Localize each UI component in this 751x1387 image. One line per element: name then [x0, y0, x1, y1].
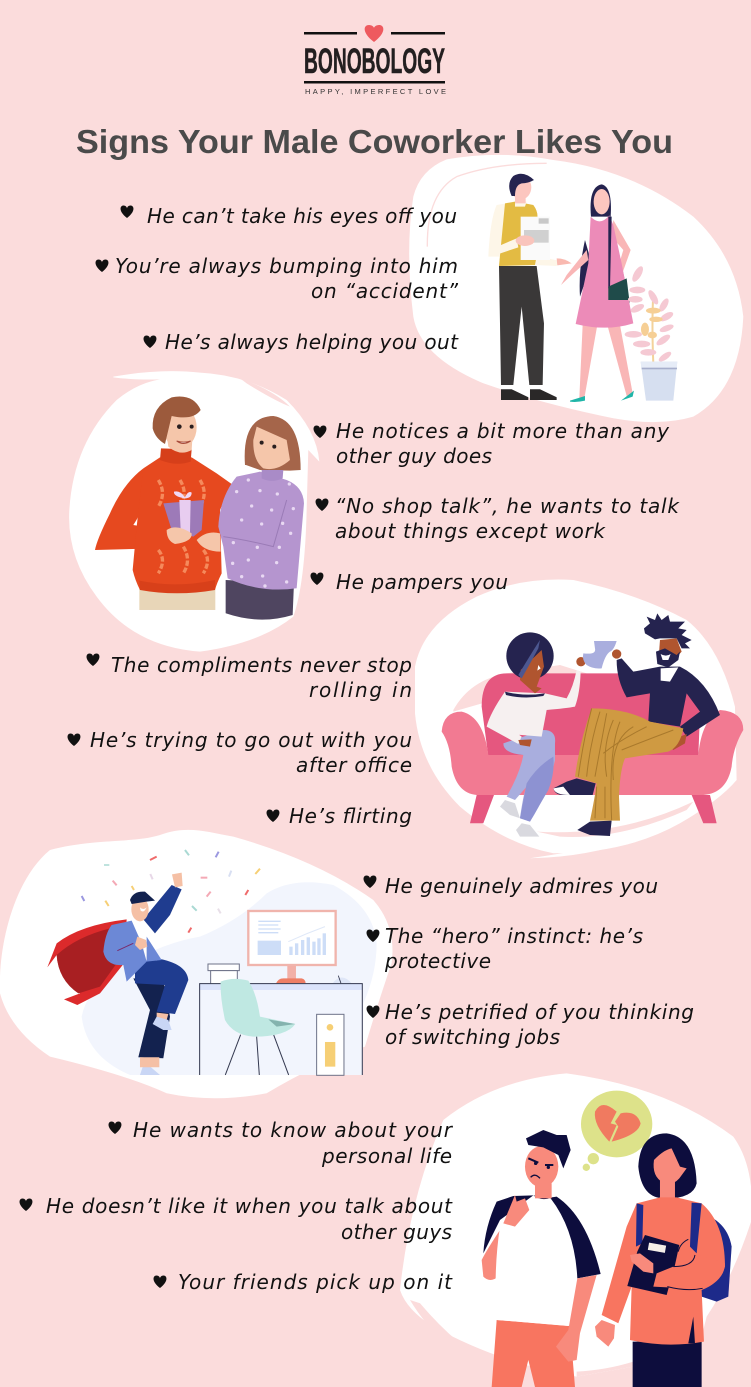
confetti	[82, 850, 260, 933]
woman	[561, 184, 634, 402]
woman in purple sweater	[218, 416, 304, 620]
text block: group five: personal life	[321, 1144, 452, 1168]
man	[488, 174, 572, 400]
logo tagline: HAPPY, IMPERFECT LOVE	[305, 87, 446, 96]
text block: group two: “No shop talk”, he wants to talk	[335, 494, 680, 518]
text block: group one	[96, 204, 459, 354]
text block: group three: The compliments never stop	[111, 653, 412, 677]
desk, monitor and computer	[199, 911, 363, 1075]
title: Signs Your Male Coworker Likes You	[76, 123, 673, 160]
woman with cup	[487, 632, 586, 837]
text block: group four: The “hero” instinct: he’s	[385, 924, 643, 948]
thought bubble with broken heart	[581, 1091, 652, 1171]
illustration: couple on a sofa	[415, 580, 743, 858]
text block: group five: Your friends pick up on it	[178, 1270, 453, 1294]
text block: group two	[311, 419, 680, 594]
white blob	[69, 371, 319, 652]
gift box	[163, 491, 221, 552]
text block: group three	[68, 653, 412, 828]
text block: group two: other guy does	[336, 444, 492, 468]
text block: group three: after office	[296, 753, 412, 777]
chair	[221, 979, 295, 1075]
illustration: colleagues handing over document	[409, 155, 743, 422]
text block: group three: rolling in	[309, 678, 412, 702]
sofa	[442, 673, 743, 823]
logo	[304, 25, 446, 96]
icon: logo heart	[365, 25, 383, 42]
text block: group five: He wants to know about your	[133, 1118, 454, 1142]
man with beard	[553, 613, 720, 836]
text block: group two: He pampers you	[336, 570, 508, 594]
illustration: superhero office worker	[0, 830, 393, 1098]
text block: group three: He’s trying to go out with you	[90, 728, 412, 752]
text block: group four: protective	[384, 949, 491, 973]
text block: group two: about things except work	[335, 519, 606, 543]
teacups	[583, 641, 617, 669]
text block: group four: He’s petrified of you thinking	[385, 1000, 694, 1024]
superhero man	[47, 873, 188, 1075]
man in red sweater	[95, 397, 232, 610]
text block: group two: He notices a bit more than any	[336, 419, 670, 443]
woman with backpack	[595, 1133, 732, 1387]
illustration: couple exchanging a gift	[69, 371, 319, 652]
plant in pot	[625, 265, 677, 401]
man	[482, 1130, 601, 1387]
text block: group one: on “accident”	[311, 279, 459, 303]
text block: group one: You’re always bumping into him	[115, 254, 458, 278]
text block: group five: He doesn’t like it when you talk about	[46, 1194, 453, 1218]
text block: group three: He’s flirting	[289, 804, 412, 828]
logo wordmark: BONOBOLOGY	[304, 42, 445, 81]
white blob	[415, 580, 737, 853]
text block: group one: He can’t take his eyes off you	[147, 204, 457, 228]
pale blue backdrop	[82, 882, 377, 1075]
white blob	[400, 1073, 751, 1377]
text block: group four	[364, 874, 694, 1049]
text block: group four: of switching jobs	[385, 1025, 560, 1049]
text block: group five	[20, 1118, 454, 1294]
text block: group five: other guys	[341, 1220, 452, 1244]
text block: group four: He genuinely admires you	[385, 874, 658, 898]
text block: group one: He’s always helping you out	[165, 330, 459, 354]
illustration: upset man and woman	[400, 1073, 751, 1387]
white blob	[409, 155, 743, 422]
white blob	[0, 830, 393, 1098]
